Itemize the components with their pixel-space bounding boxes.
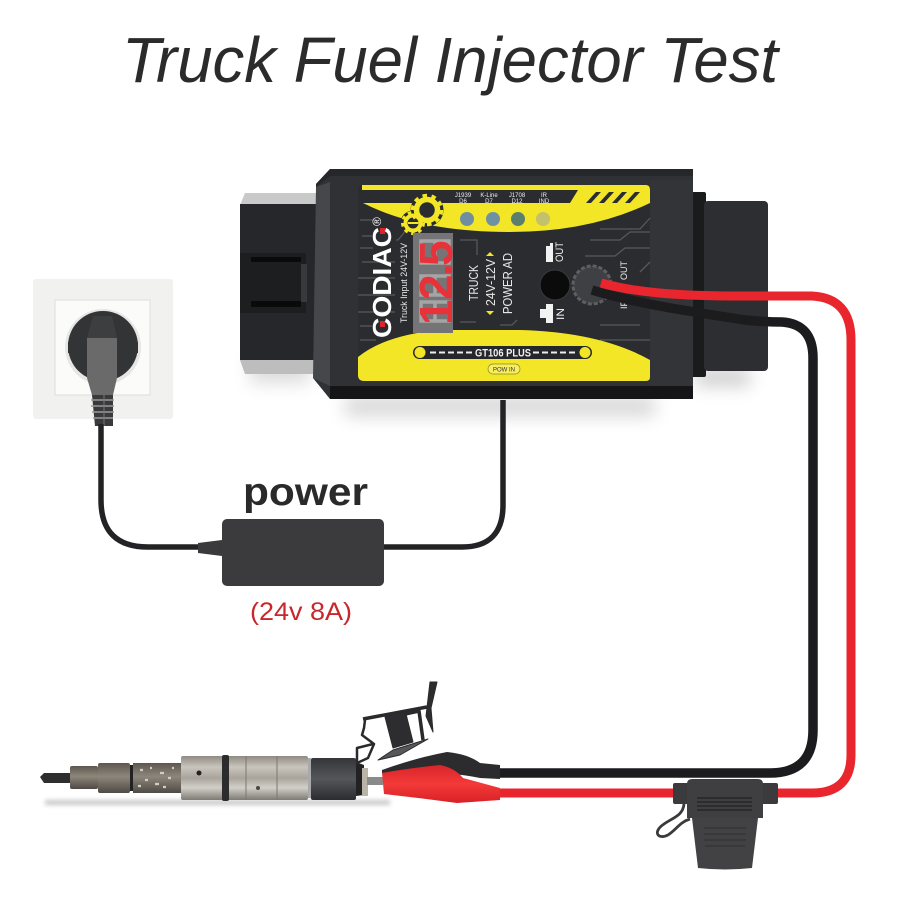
output label — [619, 260, 629, 309]
output label: OUT — [619, 260, 629, 280]
status LEDs — [460, 212, 550, 226]
fuel injector — [40, 755, 390, 805]
port labels: D6 — [459, 199, 467, 205]
port labels: J1939 — [455, 193, 472, 199]
port labels: IR — [541, 193, 548, 199]
fuse cap strap — [657, 804, 690, 837]
digital voltage display: 12.5 — [410, 240, 462, 325]
device face panel — [358, 185, 650, 381]
in switch label — [540, 304, 567, 323]
OBD connector right — [690, 192, 768, 377]
title: Truck Fuel Injector Test — [122, 24, 780, 96]
mode labels: 24V-12V — [483, 259, 498, 306]
port labels: J1708 — [509, 193, 526, 199]
port labels: D7 — [485, 199, 493, 205]
black wire to injector clip — [500, 290, 813, 773]
brand logo: CODIAC — [367, 227, 397, 338]
device body — [313, 169, 693, 399]
port labels: D12 — [511, 199, 523, 205]
inline fuse holder — [657, 779, 778, 870]
out switch label: OUT — [554, 242, 566, 262]
power adapter — [198, 519, 384, 586]
injector connector bracket — [357, 682, 437, 763]
push button — [540, 270, 570, 300]
top yellow band — [362, 185, 650, 232]
pins to clip — [367, 777, 383, 785]
icon: gears — [400, 194, 444, 236]
circuit traces — [358, 218, 650, 340]
registered mark: ® — [370, 217, 384, 226]
power label: power — [243, 471, 368, 514]
wall socket with plug — [33, 279, 173, 426]
red wire through fuse to injector clip — [500, 283, 851, 793]
power in label: POW IN — [493, 368, 515, 374]
bottom yellow band — [358, 330, 650, 381]
red alligator clip — [382, 765, 500, 803]
power cord from plug through adapter to device — [101, 400, 503, 547]
out switch label — [546, 242, 566, 262]
input note: Truck Input 24V-12V — [399, 242, 410, 323]
OBD connector left — [240, 193, 318, 374]
power in label — [488, 364, 520, 374]
mode labels: TRUCK — [466, 265, 481, 301]
adapter rating: (24v 8A) — [250, 598, 352, 626]
mode labels: POWER AD — [500, 253, 515, 314]
port labels: IND — [539, 199, 550, 205]
output label: IF — [619, 300, 629, 309]
in switch label: IN — [555, 308, 567, 320]
mode labels — [466, 252, 515, 315]
port labels: K-Line — [480, 193, 498, 199]
hazard stripes — [586, 192, 640, 203]
model name pill: GT106 PLUS — [475, 348, 531, 360]
model name pill — [413, 346, 592, 360]
black alligator clip — [382, 752, 500, 779]
device drop shadows — [250, 355, 750, 416]
cable gland — [573, 266, 611, 304]
port labels — [455, 193, 550, 205]
